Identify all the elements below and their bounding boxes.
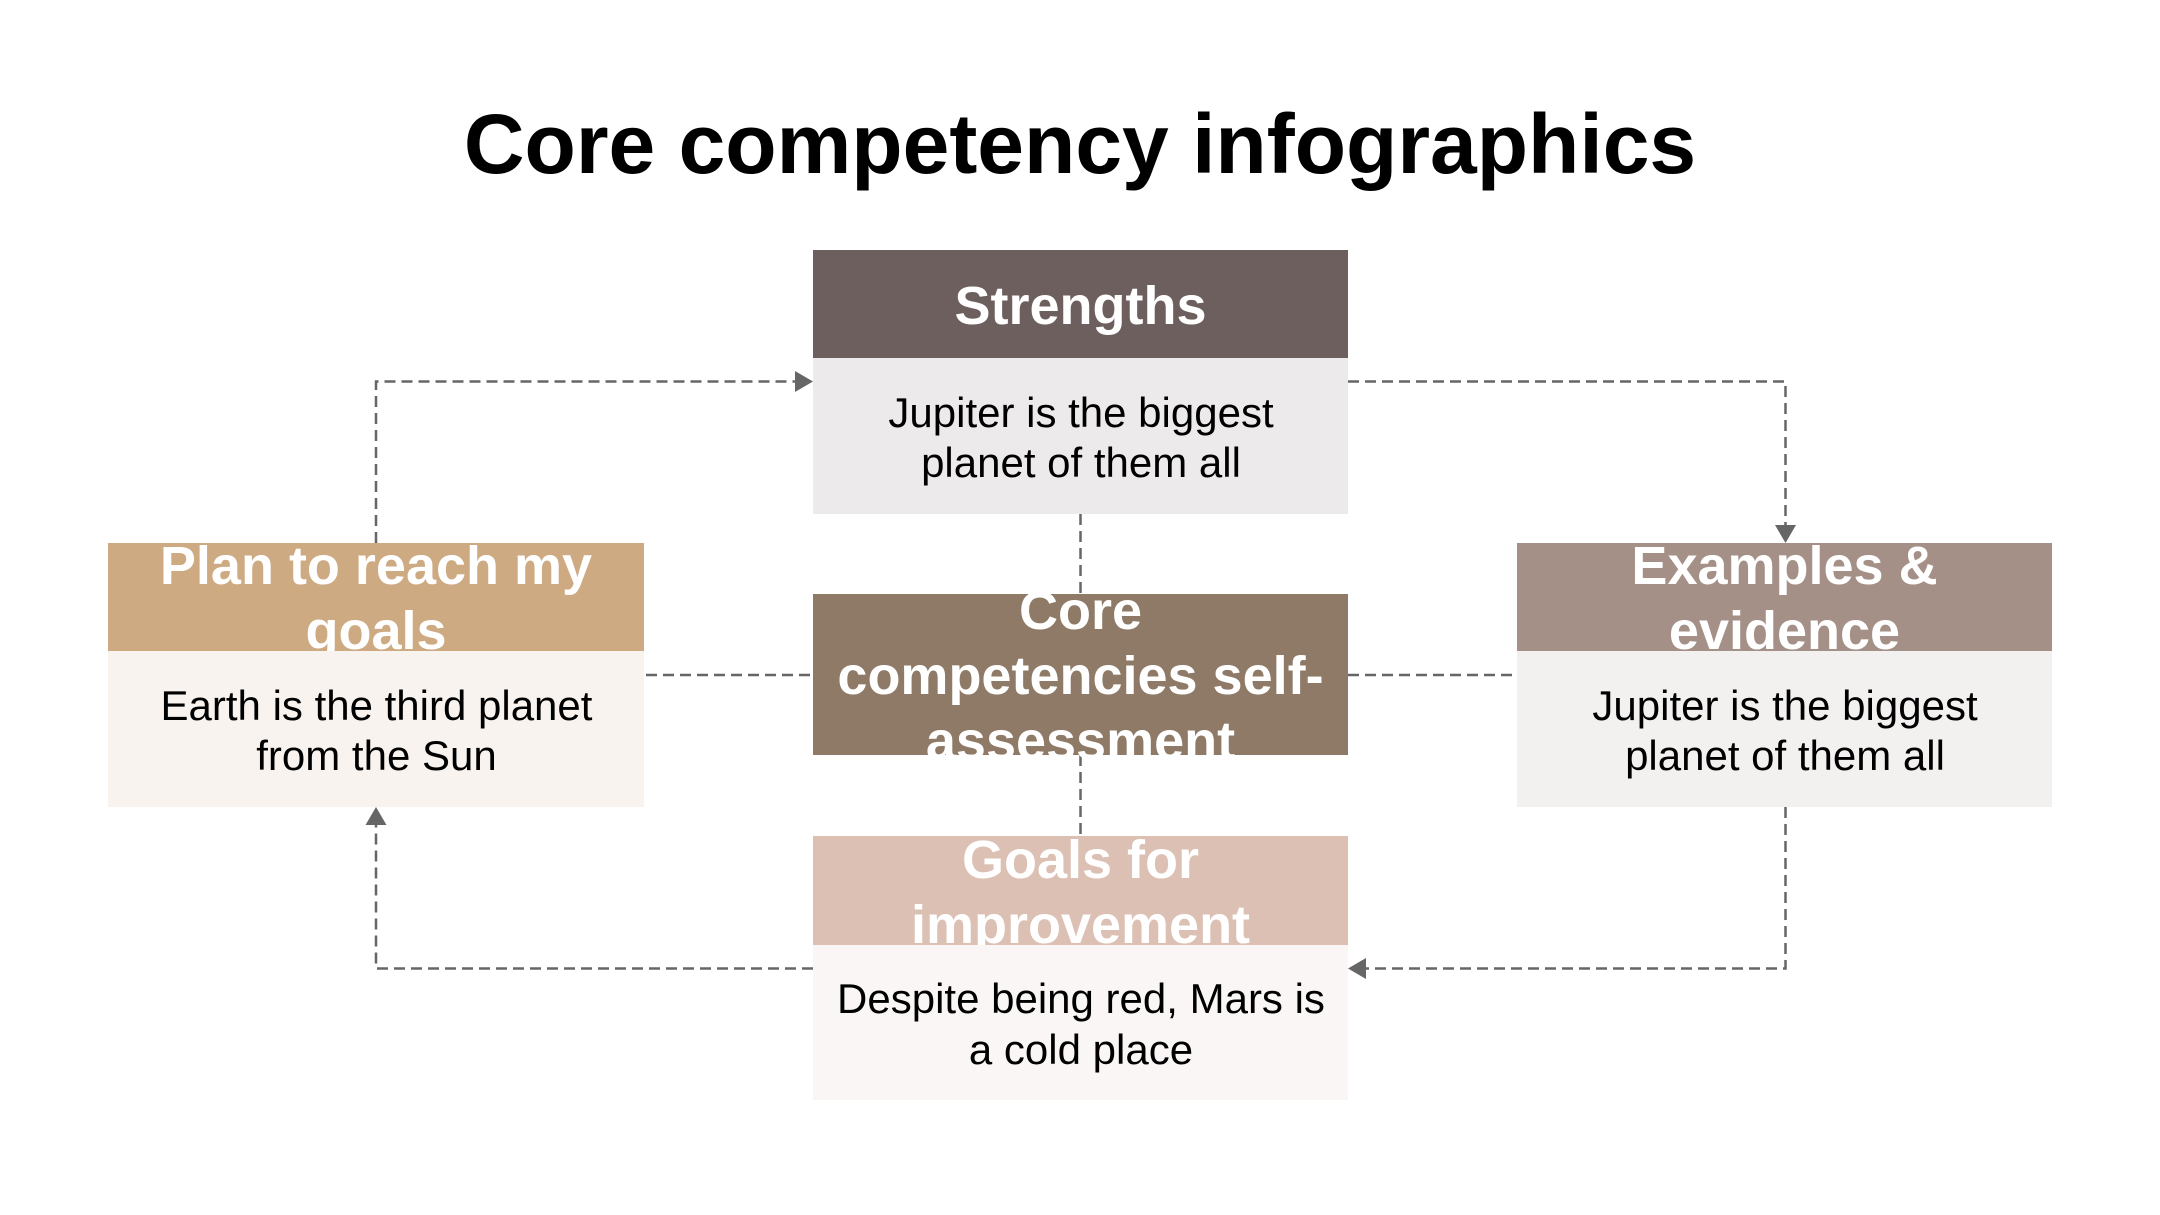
- text: goals description: Despite being red, Mars is: [837, 975, 1325, 1022]
- panel: strengths: [813, 250, 1348, 514]
- text: strengths description: planet of them all: [921, 439, 1241, 486]
- heading: plan to reach my goals: Plan to reach my: [160, 536, 592, 596]
- arrow: plan to strengths: [376, 371, 813, 543]
- text: plan description: Earth is the third planet: [161, 682, 592, 729]
- heading: examples and evidence: [1517, 543, 2052, 651]
- heading: core competencies self-assessment: competencies self-: [837, 646, 1324, 706]
- text: goals description: a cold place: [969, 1026, 1193, 1072]
- text: examples description: planet of them all: [1625, 732, 1945, 779]
- text: plan description: [108, 651, 644, 807]
- heading: examples and evidence: Examples &: [1631, 536, 1938, 596]
- text: goals description: [813, 945, 1348, 1100]
- arrow: examples to goals: [1348, 807, 1786, 979]
- connector: strengths to core: [1079, 514, 1082, 594]
- connector: plan to core: [646, 674, 813, 676]
- panel: examples and evidence: [1517, 536, 2052, 807]
- heading: goals for improvement: [813, 836, 1348, 945]
- text: strengths description: Jupiter is the biggest: [888, 389, 1274, 436]
- heading: examples and evidence: evidence: [1669, 601, 1900, 661]
- heading: core competencies self-assessment: assessment: [926, 711, 1235, 771]
- panel: plan to reach my goals: [108, 536, 644, 807]
- text: strengths description: [813, 358, 1348, 514]
- heading: core competencies self-assessment: Core: [1019, 581, 1142, 641]
- panel: core competencies self-assessment: [813, 581, 1348, 771]
- heading: core competencies self-assessment: [813, 594, 1348, 755]
- heading: strengths: [813, 250, 1348, 358]
- title: Core competency infographics: [464, 97, 1696, 191]
- heading: goals for improvement: improvement: [911, 894, 1250, 954]
- arrow: goals to plan: [366, 807, 813, 968]
- heading: goals for improvement: Goals for: [962, 830, 1199, 890]
- text: examples description: Jupiter is the biggest: [1592, 682, 1978, 729]
- arrow: strengths to examples: [1348, 382, 1796, 543]
- text: plan description: from the Sun: [256, 732, 497, 779]
- heading: plan to reach my goals: [108, 543, 644, 651]
- heading: strengths: Strengths: [954, 276, 1207, 336]
- text: examples description: [1517, 651, 2052, 807]
- panel: goals for improvement: [813, 830, 1348, 1100]
- connector: core to examples: [1348, 674, 1517, 676]
- connector: core to goals: [1079, 755, 1082, 836]
- heading: plan to reach my goals: goals: [305, 601, 447, 661]
